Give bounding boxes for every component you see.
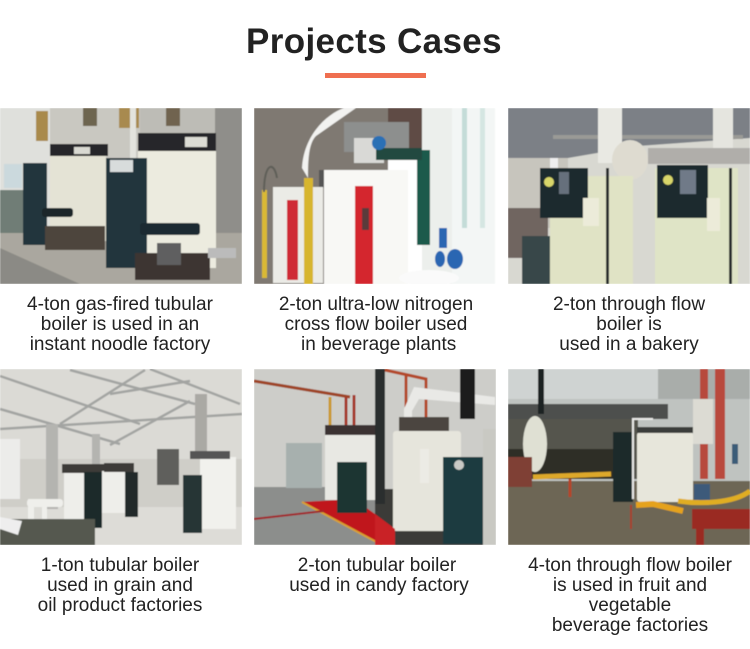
caption: 4-ton through flow: is used in fruit and (553, 575, 707, 596)
caption: 4-ton through flow: vegetable (589, 595, 671, 616)
caption: 2-ton tubular: 2-ton tubular boiler (298, 555, 456, 576)
photo: 1-ton tubular boilers (0, 369, 242, 545)
caption: 4-ton through flow: 4-ton through flow boiler (528, 555, 732, 576)
caption: 4-ton gas-fired: 4-ton gas-fired tubular (27, 294, 213, 315)
photo: 4-ton through flow boiler (508, 369, 750, 545)
caption: 4-ton gas-fired: boiler is used in an (41, 314, 199, 335)
caption: 1-ton tubular: oil product factories (38, 595, 202, 616)
caption: 4-ton gas-fired (27, 294, 213, 355)
caption: 1-ton tubular (38, 555, 202, 616)
caption: 1-ton tubular: 1-ton tubular boiler (41, 555, 199, 576)
caption: 4-ton gas-fired: instant noodle factory (30, 334, 210, 355)
caption: 2-ton through flow: used in a bakery (559, 334, 699, 355)
caption: 2-ton ultra-low nitrogen: cross flow boiler used (285, 314, 467, 335)
caption: 2-ton ultra-low nitrogen (279, 294, 473, 355)
caption: 2-ton ultra-low nitrogen: 2-ton ultra-low nitrogen (279, 294, 473, 315)
title underline (325, 73, 426, 78)
caption: 1-ton tubular: used in grain and (47, 575, 193, 596)
caption: 2-ton through flow: 2-ton through flow (553, 294, 705, 315)
photo: 2-ton through flow boilers (508, 108, 750, 284)
caption: 2-ton through flow (553, 294, 706, 355)
title: Projects Cases (246, 22, 502, 61)
caption: 2-ton tubular (289, 555, 469, 596)
photo: 4-ton gas-fired tubular boilers (0, 108, 242, 284)
photo: 2-ton ultra-low nitrogen boilers (254, 108, 494, 284)
photo: 2-ton tubular boilers (254, 369, 496, 545)
caption: 4-ton through flow (528, 555, 732, 636)
caption: 2-ton tubular: used in candy factory (289, 575, 469, 596)
caption: 2-ton through flow: boiler is (596, 314, 662, 335)
caption: 4-ton through flow: beverage factories (552, 615, 708, 636)
caption: 2-ton ultra-low nitrogen: in beverage plants (301, 334, 456, 355)
